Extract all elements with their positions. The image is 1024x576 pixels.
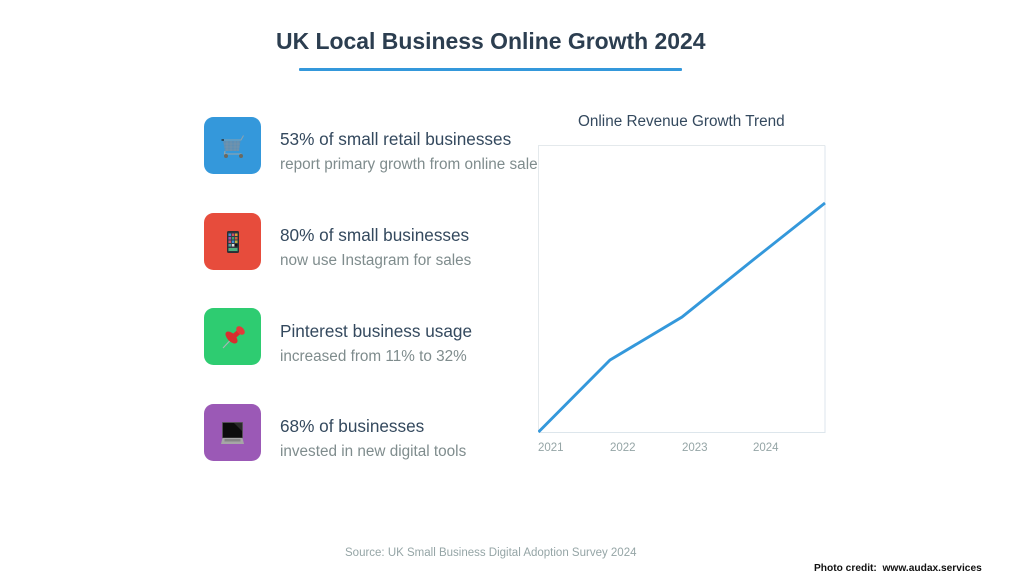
title underline	[299, 68, 682, 71]
stat 3 heading: Pinterest business usage	[280, 321, 472, 341]
panel: stat 1	[204, 117, 261, 174]
icon: shopping cart	[204, 117, 261, 174]
icon: laptop	[204, 404, 261, 461]
stat 4 heading: 68% of businesses	[280, 416, 424, 436]
photo credit: Photo credit: www.audax.services	[814, 562, 982, 574]
x-axis label 2021: 2021	[538, 442, 564, 454]
chart title: Online Revenue Growth Trend	[578, 113, 785, 130]
stat 4 detail: invested in new digital tools	[280, 443, 466, 460]
title: UK Local Business Online Growth 2024	[276, 28, 706, 54]
stat 2 heading: 80% of small businesses	[280, 225, 469, 245]
stat 1 heading: 53% of small retail businesses	[280, 129, 511, 149]
panel: stat 2	[204, 213, 261, 270]
icon: mobile phone	[204, 213, 261, 270]
panel: stat 4	[204, 404, 261, 461]
trend line	[538, 203, 825, 432]
panel: stat 3	[204, 308, 261, 365]
x-axis label 2022: 2022	[610, 442, 636, 454]
stat 2 detail: now use Instagram for sales	[280, 252, 471, 269]
line chart	[538, 145, 826, 433]
x-axis label 2024: 2024	[753, 442, 779, 454]
stat 3 detail: increased from 11% to 32%	[280, 348, 467, 365]
source note: Source: UK Small Business Digital Adoption Survey 2024	[345, 547, 636, 559]
icon: pushpin	[204, 308, 261, 365]
stat 1 detail: report primary growth from online sales	[280, 156, 538, 173]
x-axis label 2023: 2023	[682, 442, 708, 454]
